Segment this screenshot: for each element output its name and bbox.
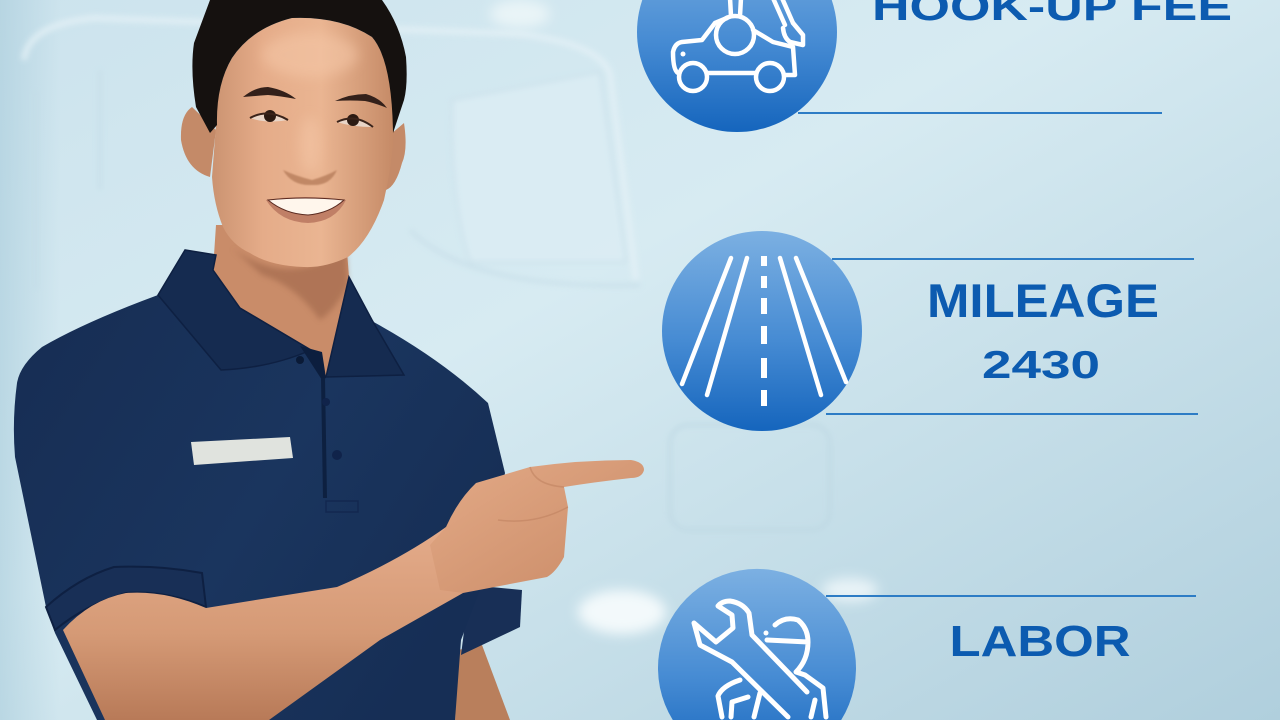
- smile: [266, 197, 346, 223]
- hand detail: [498, 467, 568, 521]
- divider line: [826, 595, 1196, 597]
- neck: [213, 225, 349, 377]
- hair: [192, 0, 407, 133]
- panel: hook-up fee: [637, 0, 1232, 132]
- placket and buttons: [296, 346, 358, 512]
- panel: labor: [658, 569, 1196, 720]
- divider line: [798, 112, 1162, 114]
- collar right: [326, 277, 404, 377]
- value: 2430: 2430: [982, 344, 1100, 387]
- ears: [181, 107, 406, 190]
- collar left: [158, 250, 311, 370]
- forehead and cheek highlights: [262, 33, 358, 173]
- heading: labor: LABOR: [950, 617, 1130, 666]
- eyebrows: [243, 87, 387, 108]
- pointing arm: [63, 527, 463, 720]
- icon: road: [662, 231, 862, 431]
- lower forearm: [455, 645, 510, 720]
- icon: wrench and worker: [658, 569, 856, 720]
- panel: mileage: [662, 231, 1198, 431]
- eyes: [250, 110, 373, 127]
- right sleeve: [461, 585, 522, 655]
- heading: mileage: MILEAGE: [927, 274, 1159, 327]
- divider line: [832, 258, 1194, 260]
- divider line: [826, 413, 1198, 415]
- neck shadow: [232, 248, 348, 320]
- icon: tow hook and car: [637, 0, 837, 132]
- face: [212, 18, 394, 267]
- name badge: [191, 437, 293, 465]
- polo shirt: [14, 250, 505, 720]
- sleeve band: [46, 567, 206, 630]
- person: man in navy polo pointing right: [14, 0, 644, 720]
- nose: [283, 170, 337, 185]
- hand: [430, 460, 644, 593]
